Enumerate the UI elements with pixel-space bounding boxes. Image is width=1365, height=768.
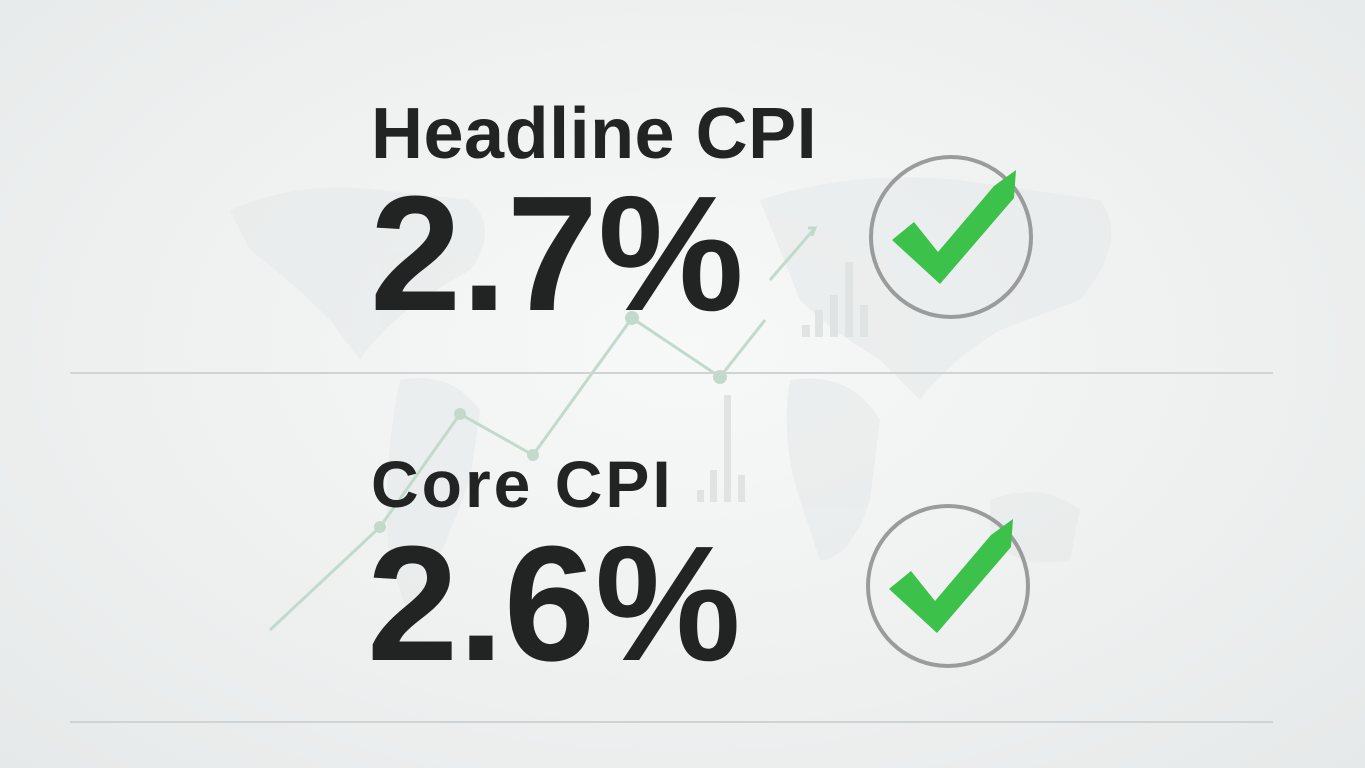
icon: check circle 2	[866, 504, 1030, 668]
icon: check circle 1	[869, 155, 1033, 319]
divider lines	[70, 372, 1273, 374]
value: 2.6%: 2.6%	[367, 512, 741, 695]
heading: Headline CPI: Headline CPI	[371, 94, 817, 174]
value: 2.7%: 2.7%	[370, 162, 744, 345]
heading: Core CPI: Core CPI	[371, 447, 674, 521]
